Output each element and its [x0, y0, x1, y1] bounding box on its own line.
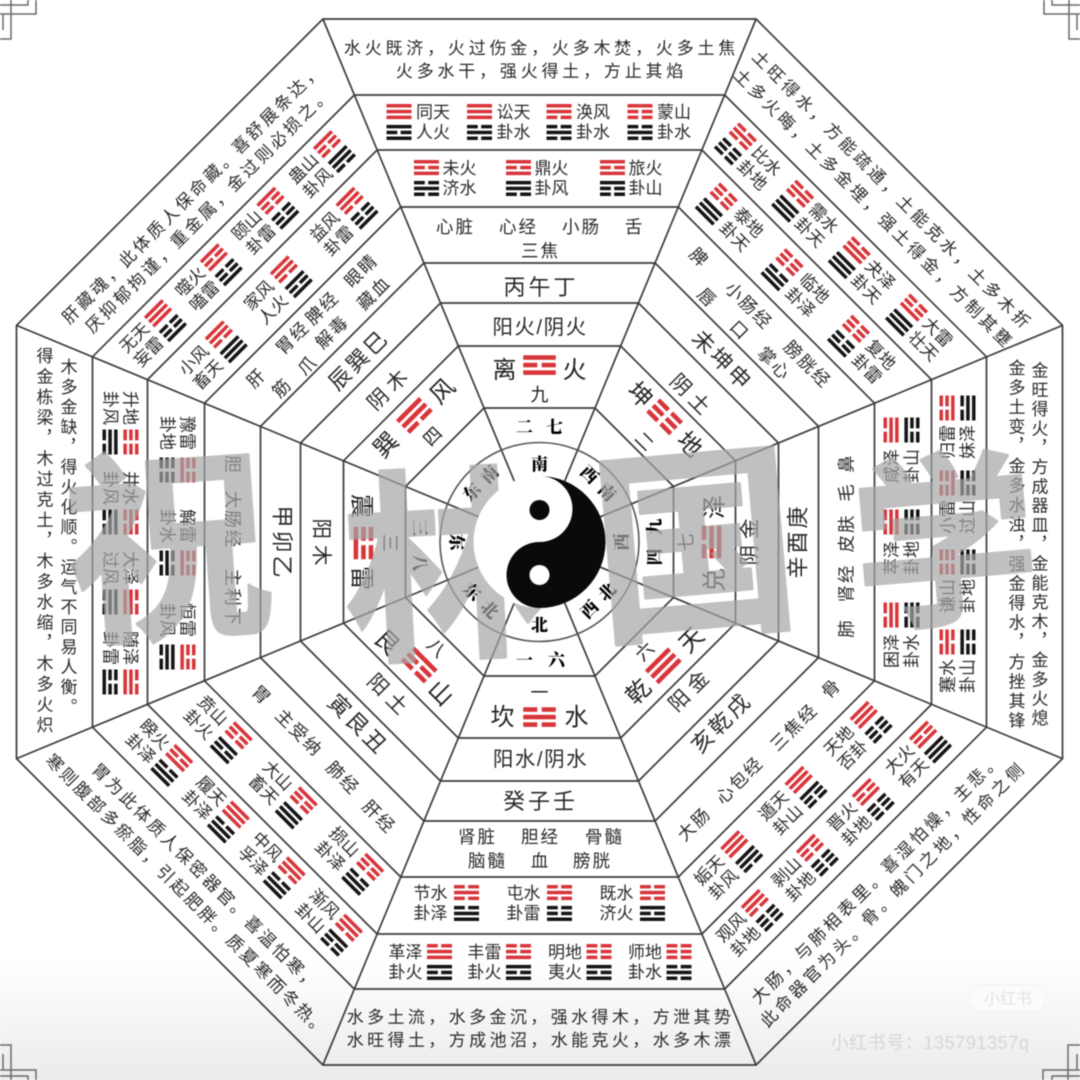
south: outer hexagrams: 卦火 — [388, 963, 422, 982]
north east: organs: 口 — [726, 317, 754, 345]
north west: elemental text: 肝藏魂，此体质人保命藏。喜舒展条达， — [59, 60, 327, 328]
east: organs: 肾经 — [836, 564, 856, 602]
west: inner hexagrams: 卦水 — [158, 509, 176, 543]
north west: outer hexagrams: 噬火 — [172, 263, 209, 301]
south: numbers — [516, 651, 567, 670]
west: numbers: 三 — [410, 520, 428, 536]
east: inner hexagrams: 咸泽 — [882, 449, 902, 483]
north: inner hexagrams: 济水 — [442, 179, 476, 198]
south west: elemental text: 寒则腹部多瘀脂，引起肥胖。质夏寒而冬热。 — [42, 751, 332, 1041]
north: numbers — [516, 418, 563, 437]
south: yin yang label: 阳水/阴水 — [493, 748, 588, 771]
north east: elemental text: 土多火晦，土多金埋，强土得金，方制其壅 — [730, 66, 1017, 353]
south: outer hexagrams: 革泽 — [388, 943, 422, 962]
south east: stems and branches: 亥乾戌 — [686, 687, 757, 758]
south east: organs: 大肠 — [673, 803, 715, 845]
north west: inner hexagrams: 家风 — [240, 277, 278, 314]
watermark badge: 小红书 — [984, 990, 1032, 1008]
north east: trigram 坤: 二 — [631, 428, 658, 455]
east: numbers — [646, 518, 664, 566]
west: elemental text — [34, 347, 77, 737]
west: outer hexagrams: 卦风 — [100, 391, 120, 425]
west: outer hexagrams: 升地 — [120, 391, 140, 425]
south: outer hexagrams — [388, 943, 692, 982]
east: outer hexagrams: 小雷 — [938, 500, 958, 534]
south east: organs: 骨 — [818, 674, 846, 702]
north: numbers: 二 — [516, 418, 533, 437]
east: outer hexagrams: 归雷 — [938, 425, 958, 459]
east: trigram 兑: 泽 — [702, 495, 728, 519]
east: trigram 兑: 七 — [676, 533, 696, 551]
east: organs: 皮肤 — [836, 514, 856, 552]
calligraphy watermark: 林 — [334, 400, 554, 707]
north west: inner hexagrams: 卦雷 — [320, 222, 358, 260]
south: outer hexagrams: 明地 — [548, 943, 582, 962]
north: trigram 离: 九 — [530, 385, 548, 405]
north: inner hexagrams: 卦山 — [628, 179, 662, 198]
south: trigram 坎: 坎 — [490, 704, 514, 731]
south: inner hexagrams: 卦泽 — [414, 904, 448, 923]
south east: trigram 乾: 乾 — [621, 674, 657, 710]
north east: inner hexagrams: 卦雷 — [848, 350, 885, 388]
south: inner hexagrams: 屯水 — [506, 884, 540, 903]
north: elemental text: 火多水干，强火得土，方止其焰 — [396, 62, 687, 81]
south: outer hexagrams: 卦水 — [628, 963, 662, 982]
west: inner hexagrams: 卦地 — [158, 416, 176, 450]
west: outer hexagrams: 卦风 — [100, 471, 120, 505]
south east: outer hexagrams: 卦地 — [838, 812, 875, 850]
west: inner hexagrams: 豫雷 — [178, 416, 196, 450]
south west: direction: 东北 — [459, 579, 508, 628]
south east: outer hexagrams: 卦地 — [782, 868, 820, 905]
south west: outer hexagrams: 卦泽 — [122, 730, 159, 768]
south east: inner hexagrams: 否卦 — [834, 736, 872, 774]
background — [0, 960, 1080, 1080]
north: outer hexagrams: 涣风 — [576, 103, 610, 122]
north east: organs: 小肠经 — [721, 278, 777, 334]
north west: direction: 东南 — [459, 456, 508, 505]
west: organs: 大肠经 — [222, 491, 242, 549]
east: direction: 西 — [612, 534, 632, 550]
south west: inner hexagrams: 损山 — [325, 823, 363, 861]
north: organs: 心经 — [499, 217, 538, 237]
south east: elemental text: 大肠，与肺相表里。喜湿怕燥，主悲。 — [748, 749, 1006, 1008]
east: outer hexagrams: 蹇水 — [938, 659, 958, 693]
sector: north east — [455, 47, 1036, 628]
east: elemental text: 金多土变，金多水浊，强金得水，方挫其锋 — [1006, 359, 1025, 731]
north east: outer hexagrams: 比水 — [747, 142, 785, 180]
south: organs: 膀胱 — [573, 851, 612, 871]
west: outer hexagrams: 卦雷 — [100, 631, 120, 665]
north east: outer hexagrams: 壮天 — [904, 328, 942, 365]
south east: inner hexagrams: 遁天 — [755, 787, 793, 825]
south east: outer hexagrams: 大火 — [881, 741, 919, 778]
north: direction: 南 — [531, 454, 548, 474]
calligraphy watermark: 国 — [579, 375, 809, 688]
south east: trigram 乾: 六 — [631, 638, 658, 665]
north: outer hexagrams: 蒙山 — [657, 103, 691, 122]
west: inner hexagrams: 恒雷 — [178, 603, 196, 637]
east: elemental text: 金旺得火，方成器皿，金能克木，金多火熄 — [1028, 362, 1048, 728]
south west: inner hexagrams: 畜天 — [245, 771, 282, 809]
north west: yin yang label: 阴木 — [363, 361, 417, 415]
south: organs: 血 — [531, 851, 550, 871]
west: trigram 震: 震 — [348, 494, 374, 518]
north west: organs: 脾经 — [302, 287, 343, 329]
north east: organs: 脾 — [685, 244, 713, 272]
north east: organs: 唇 — [693, 284, 721, 312]
north west: stems and branches: 辰巽巳 — [323, 325, 394, 395]
north east: organs — [669, 243, 835, 409]
south east: trigram 乾 — [606, 607, 710, 711]
south: inner hexagrams: 济火 — [600, 904, 634, 923]
north: trigram 离 — [492, 355, 586, 405]
south: organs: 脑髓 — [468, 851, 507, 871]
south: elemental text — [347, 1008, 734, 1050]
north: inner hexagrams: 鼎火 — [534, 159, 568, 178]
west: outer hexagrams: 过风 — [100, 551, 120, 585]
south: organs: 骨髓 — [585, 827, 624, 847]
west: trigram 震: 三 — [380, 534, 400, 552]
north: outer hexagrams: 卦水 — [496, 123, 530, 142]
north west: outer hexagrams: 卦雷 — [243, 221, 280, 258]
south west: trigram 艮: 八 — [423, 635, 450, 662]
sector: north west — [59, 60, 616, 617]
east: organs: 毛 — [836, 482, 856, 502]
north: yin yang label: 阳火/阴火 — [492, 316, 588, 339]
north west: inner hexagrams: 畜天 — [189, 356, 227, 394]
east: outer hexagrams — [938, 396, 978, 693]
west: trigram 震: 雷 — [348, 566, 374, 590]
south: organs: 胆经 — [521, 827, 560, 847]
south: inner hexagrams — [414, 884, 665, 923]
south west: outer hexagrams: 中风 — [248, 828, 286, 866]
west: elemental text: 得金栋梁，木过克土，木多水缩，木多火炽 — [34, 347, 53, 737]
south: numbers: 六 — [548, 651, 567, 670]
south: elemental text: 水旺得土，方成池沼，水能克火，水多木漂 — [347, 1031, 734, 1050]
east: stems and branches: 辛酉庚 — [786, 503, 810, 579]
yin yang symbol — [474, 476, 606, 608]
north west: outer hexagrams — [116, 129, 357, 371]
north east: organs: 掌心 — [753, 343, 795, 385]
south east: organs — [673, 674, 846, 846]
north east: inner hexagrams — [693, 182, 899, 388]
west: outer hexagrams: 大泽 — [120, 551, 140, 585]
watermark account id: 小红书号：135791357q — [830, 1033, 1030, 1053]
north: organs: 舌 — [625, 217, 644, 237]
south west: organs — [246, 681, 402, 838]
west: direction: 东 — [446, 534, 466, 552]
watermark badge — [970, 985, 1046, 1011]
north west: inner hexagrams — [174, 186, 381, 394]
south east: outer hexagrams: 有天 — [895, 755, 933, 792]
north: elemental text — [344, 39, 739, 81]
north west: organs: 爪 — [294, 351, 322, 379]
north west: outer hexagrams: 颐山 — [228, 207, 266, 244]
north west: trigram 巽: 四 — [419, 423, 446, 450]
north west: organs: 解毒 — [311, 311, 353, 353]
east: organs: 鼻 — [836, 453, 856, 473]
east: outer hexagrams: 过山 — [958, 500, 978, 534]
south west: organs: 胃 — [248, 681, 276, 709]
south: numbers: 一 — [516, 651, 533, 670]
east: outer hexagrams: 卦山 — [958, 659, 978, 693]
north west: inner hexagrams: 益风 — [306, 208, 344, 246]
east: organs: 肺 — [836, 618, 856, 638]
west: inner hexagrams: 卦风 — [158, 603, 176, 637]
north: outer hexagrams: 同天 — [416, 103, 450, 122]
north: outer hexagrams: 卦水 — [576, 123, 610, 142]
south: trigram 坎: 水 — [564, 704, 588, 731]
calligraphy watermark: 祝 — [55, 378, 280, 689]
south east: inner hexagrams: 卦风 — [705, 866, 742, 903]
west: inner hexagrams — [158, 416, 196, 670]
east: yin yang label: 阴金 — [738, 512, 762, 566]
east: inner hexagrams: 困泽 — [882, 634, 902, 668]
north west: organs: 眼睛 — [340, 250, 382, 291]
north west: organs — [241, 249, 403, 411]
south: inner hexagrams: 卦雷 — [506, 904, 540, 923]
south: inner hexagrams: 既水 — [600, 884, 634, 903]
north east: trigram 坤 — [603, 377, 707, 481]
west: numbers — [410, 520, 428, 572]
north west: outer hexagrams: 蛊山 — [285, 150, 322, 188]
east: numbers: 四 — [646, 548, 664, 566]
south west: yin yang label: 阳土 — [362, 670, 416, 723]
south west: inner hexagrams: 卦泽 — [311, 838, 349, 875]
north: outer hexagrams — [386, 103, 691, 142]
north west: organs: 筋 — [268, 374, 296, 402]
south east: outer hexagrams: 卦地 — [727, 923, 764, 961]
west: yin yang label: 阳木 — [310, 518, 332, 572]
north east: outer hexagrams: 卦天 — [791, 214, 828, 251]
south: trigram 坎 — [490, 683, 588, 731]
west: organs — [222, 455, 242, 627]
north east: outer hexagrams: 大雷 — [919, 314, 956, 351]
south west: elemental text: 胃为此体质人保密器官。喜温怕寒， — [88, 760, 323, 995]
north west: inner hexagrams: 人火 — [255, 291, 292, 328]
south west: organs: 肺经 — [322, 757, 364, 799]
north east: inner hexagrams: 泰地 — [730, 204, 767, 241]
north: inner hexagrams: 旅火 — [628, 159, 662, 178]
south: outer hexagrams: 卦火 — [468, 963, 502, 982]
north west: outer hexagrams: 无天 — [116, 319, 153, 357]
west: trigram 震 — [348, 494, 400, 590]
north east: outer hexagrams: 夬泽 — [861, 256, 899, 294]
east: inner hexagrams: 卦地 — [902, 541, 922, 575]
south west: trigram 艮 — [368, 605, 477, 713]
south west: outer hexagrams — [122, 716, 364, 958]
west: organs: 主利下 — [222, 569, 242, 627]
south west: inner hexagrams: 大山 — [259, 757, 296, 794]
south: outer hexagrams: 丰雷 — [468, 943, 502, 962]
south east: inner hexagrams: 姤天 — [691, 852, 728, 889]
east: organs — [836, 453, 856, 638]
west: inner hexagrams: 解雷 — [178, 509, 196, 543]
south west: outer hexagrams: 睽火 — [136, 716, 173, 753]
south: direction: 北 — [531, 616, 548, 635]
south: organs: 肾脏 — [458, 827, 497, 847]
north east: inner hexagrams: 临地 — [795, 270, 833, 307]
south west: outer hexagrams: 渐风 — [305, 886, 343, 923]
south east: outer hexagrams: 观风 — [713, 909, 750, 946]
north: stems and branches: 丙午丁 — [503, 275, 579, 300]
east: outer hexagrams: 谦山 — [938, 579, 958, 613]
west: outer hexagrams — [100, 391, 140, 694]
south east: outer hexagrams: 晋火 — [824, 798, 861, 835]
south: outer hexagrams: 夷火 — [548, 963, 582, 982]
south: outer hexagrams: 师地 — [628, 943, 662, 962]
north: organs: 小肠 — [562, 217, 601, 237]
north west: outer hexagrams: 卦风 — [299, 164, 337, 202]
south east: trigram 乾: 天 — [674, 623, 710, 659]
north east: stems and branches: 未坤申 — [687, 325, 758, 396]
south west: inner hexagrams: 卦火 — [180, 706, 217, 744]
north west: trigram 巽 — [368, 372, 476, 480]
north: outer hexagrams: 卦水 — [657, 123, 691, 142]
east: inner hexagrams: 萃泽 — [882, 541, 902, 575]
north east: inner hexagrams: 复地 — [862, 336, 899, 374]
north: outer hexagrams: 人火 — [416, 123, 450, 142]
south west: stems and branches: 寅艮丑 — [323, 689, 393, 760]
west: elemental text: 木多金缺，得火化顺。运气不同易人衡。 — [58, 358, 77, 718]
north west: elemental text: 厌抑郁拘谨，重金属，金过则必损之。 — [82, 83, 336, 337]
north: organs: 心脏 — [436, 217, 475, 237]
north: organs — [436, 217, 644, 261]
north west: trigram 巽: 风 — [425, 374, 461, 410]
east: trigram 兑: 兑 — [702, 568, 728, 592]
north: trigram 离: 离 — [492, 357, 516, 384]
south west: outer hexagrams: 卦泽 — [178, 787, 216, 824]
south west: organs: 主受纳 — [271, 705, 327, 761]
south: stems and branches: 癸子壬 — [503, 789, 578, 814]
south east: inner hexagrams: 卦山 — [769, 802, 807, 839]
south east: yin yang label: 阳金 — [664, 663, 718, 716]
south west: trigram 艮: 山 — [422, 676, 458, 712]
south east: organs: 三焦经 — [766, 700, 822, 755]
north east: outer hexagrams — [712, 122, 956, 365]
south east: elemental text: 此命器官为头。骨。魄门之地，性命之侧 — [757, 758, 1030, 1031]
sector: north — [344, 39, 739, 474]
east: numbers: 九 — [646, 518, 664, 536]
south east: inner hexagrams — [691, 700, 894, 903]
south east: organs: 心包经 — [712, 753, 767, 808]
calligraphy watermark: 学 — [840, 388, 1048, 672]
north east: elemental text: 土旺得水，方能疏通，土能克水，土多木折 — [748, 47, 1036, 335]
south: elemental text: 水多土流，水多金沉，强水得木，方泄其势 — [347, 1008, 734, 1027]
east: outer hexagrams: 卦地 — [958, 579, 978, 613]
north: trigram 离: 火 — [562, 357, 586, 384]
north east: trigram 坤: 坤 — [622, 377, 658, 413]
north: elemental text: 水火既济，火过伤金，火多木焚，火多土焦 — [344, 39, 739, 58]
north: numbers: 七 — [546, 418, 563, 437]
south: inner hexagrams: 节水 — [414, 884, 448, 903]
north west: organs: 胃经 — [272, 317, 314, 359]
sector: south west — [42, 456, 627, 1041]
west: outer hexagrams: 井水 — [120, 471, 140, 505]
east: trigram 兑 — [676, 495, 728, 592]
south west: inner hexagrams — [180, 692, 385, 897]
east: outer hexagrams: 妹泽 — [958, 425, 978, 459]
west: organs: 胆 — [222, 455, 242, 475]
sector: south — [347, 616, 734, 1050]
south: organs — [458, 827, 624, 871]
south east: direction: 西北 — [576, 573, 626, 623]
south: trigram 坎: 一 — [530, 683, 548, 703]
north: outer hexagrams: 讼天 — [496, 103, 530, 122]
south east: inner hexagrams: 天地 — [820, 722, 858, 760]
north west: outer hexagrams: 妄雷 — [130, 333, 168, 371]
north east: direction: 西南 — [576, 461, 626, 511]
west: stems and branches: 甲卯乙 — [270, 505, 294, 581]
east: elemental text — [1006, 359, 1048, 731]
east: inner hexagrams — [882, 418, 922, 668]
west: numbers: 八 — [410, 554, 428, 572]
south east: outer hexagrams: 剥山 — [768, 854, 805, 891]
sector: south east — [462, 463, 1030, 1031]
north: organs: 三焦 — [521, 241, 560, 261]
east: inner hexagrams: 卦水 — [902, 634, 922, 668]
south west: outer hexagrams: 孚泽 — [234, 843, 272, 880]
south east: outer hexagrams — [713, 720, 954, 961]
north: inner hexagrams — [414, 159, 662, 198]
sector: east — [612, 359, 1048, 731]
sector: west — [34, 347, 466, 737]
south west: organs: 肝经 — [358, 796, 400, 838]
north east: yin yang label: 阴土 — [665, 370, 719, 424]
south west: outer hexagrams: 卦山 — [291, 900, 329, 937]
north: inner hexagrams: 未火 — [442, 159, 476, 178]
calligraphy watermark — [55, 375, 1048, 707]
south west: outer hexagrams: 履天 — [192, 773, 230, 810]
north east: inner hexagrams: 卦泽 — [781, 284, 819, 321]
north east: outer hexagrams: 卦天 — [847, 270, 885, 308]
north west: trigram 巽: 巽 — [368, 427, 404, 464]
north west: inner hexagrams: 小风 — [175, 342, 213, 379]
west: outer hexagrams: 随泽 — [120, 631, 140, 665]
north east: trigram 坤: 地 — [671, 427, 707, 463]
north east: organs: 膀胱经 — [780, 337, 835, 392]
north west: organs: 肝 — [243, 364, 271, 392]
south west: inner hexagrams: 贲山 — [194, 692, 231, 729]
north west: organs: 藏血 — [353, 272, 395, 314]
east: inner hexagrams: 卦山 — [902, 449, 922, 483]
north east: outer hexagrams: 卦地 — [733, 157, 771, 194]
north: inner hexagrams: 卦风 — [534, 179, 568, 198]
north east: inner hexagrams: 卦天 — [716, 218, 753, 256]
north east: outer hexagrams: 需水 — [805, 200, 842, 237]
north west: outer hexagrams: 嗑雷 — [186, 278, 223, 315]
south west: trigram 艮: 艮 — [368, 625, 404, 661]
